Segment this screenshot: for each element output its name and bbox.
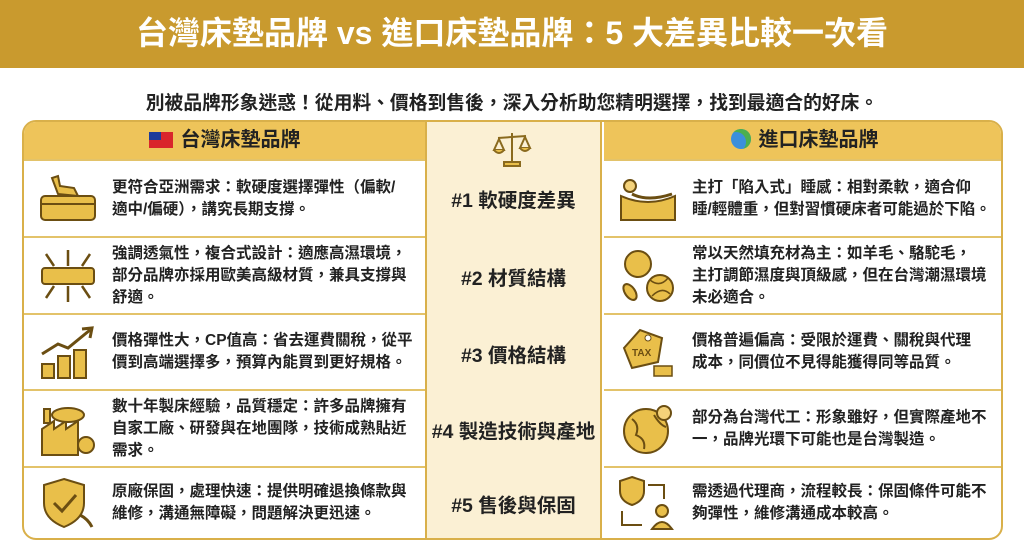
middle column background [425,122,602,538]
row 3 right [604,313,1005,389]
header: Taiwan: 台灣床墊品牌 [180,129,300,151]
row 2 left: 強調透氣性，複合式設計：適應高濕環境， [112,244,407,262]
comparison table [22,120,1003,540]
row 2 right [604,236,1005,313]
row 2 left: 舒適。 [112,288,159,306]
row 5 right: 夠彈性，維修溝通成本較高。 [692,505,894,522]
row 2 right: 主打調節濕度與頂級感，但在台灣潮濕環境 [692,266,987,284]
subtitle: 別被品牌形象迷惑！從用料、價格到售後，深入分析助您精明選擇，找到最適合的好床。 [146,92,878,113]
row 5 middle label: #5 售後與保固 [451,495,576,517]
title [0,0,1024,68]
row 2 right: 未必適合。 [692,288,770,306]
row 3 left: 價到高端選擇多，預算內能買到更好規格。 [112,354,407,371]
header: imported: 進口床墊品牌 [758,129,878,151]
row 4 left [24,389,425,466]
row 4 right: 部分為台灣代工：形象雖好，但實際產地不 [692,408,987,426]
header: Taiwan [24,122,425,159]
row 5 right: 需透過代理商，流程較長：保固條件可能不 [692,483,987,500]
row 5 left [24,466,425,538]
row 2 left: 部分品牌亦採用歐美高級材質，兼具支撐與 [112,266,407,284]
row 4 right [604,389,1005,466]
header: imported [604,122,1005,159]
row 3 right: 成本，同價位不見得能獲得同等品質。 [692,354,956,371]
row 1 middle label: #1 軟硬度差異 [451,190,576,212]
row 3 right: 價格普遍偏高：受限於運費、關稅與代理 [692,332,971,349]
row 4 left: 需求。 [112,442,159,458]
row 3 right: TAX [632,348,652,359]
row 4 right: 一，品牌光環下可能也是台灣製造。 [692,430,940,448]
icon: scale [492,133,532,167]
row 3 middle label: #3 價格結構 [461,345,566,367]
row 1 left: 更符合亞洲需求：軟硬度選擇彈性（偏軟/ [112,178,395,196]
row 5 right [604,466,1005,538]
row 5 left: 維修，溝通無障礙，問題解決更迅速。 [112,505,376,522]
row 1 right: 睡/輕體重，但對習慣硬床者可能過於下陷。 [692,200,991,218]
row 2 middle label: #2 材質結構 [461,268,566,290]
row 5 left: 原廠保固，處理快速：提供明確退換條款與 [112,483,407,500]
row 1 right: 主打「陷入式」睡感：相對柔軟，適合仰 [692,178,971,196]
row 2 right: 常以天然填充材為主：如羊毛、駱駝毛， [692,244,971,262]
row 1 left: 適中/偏硬），講究長期支撐。 [112,200,310,218]
row 3 left [24,313,425,389]
title: 台灣床墊品牌 vs 進口床墊品牌：5 大差異比較一次看 [136,15,888,51]
row 4 left: 自家工廠、研發與在地團隊，技術成熟貼近 [112,420,407,436]
row 4 left: 數十年製床經驗，品質穩定：許多品牌擁有 [112,398,407,414]
row 2 left [24,236,425,313]
row 1 right [604,159,1005,236]
row 3 left: 價格彈性大，CP值高：省去運費關稅，從平 [112,332,413,349]
row 1 left [24,159,425,236]
row 4 middle label: #4 製造技術與產地 [432,421,595,443]
